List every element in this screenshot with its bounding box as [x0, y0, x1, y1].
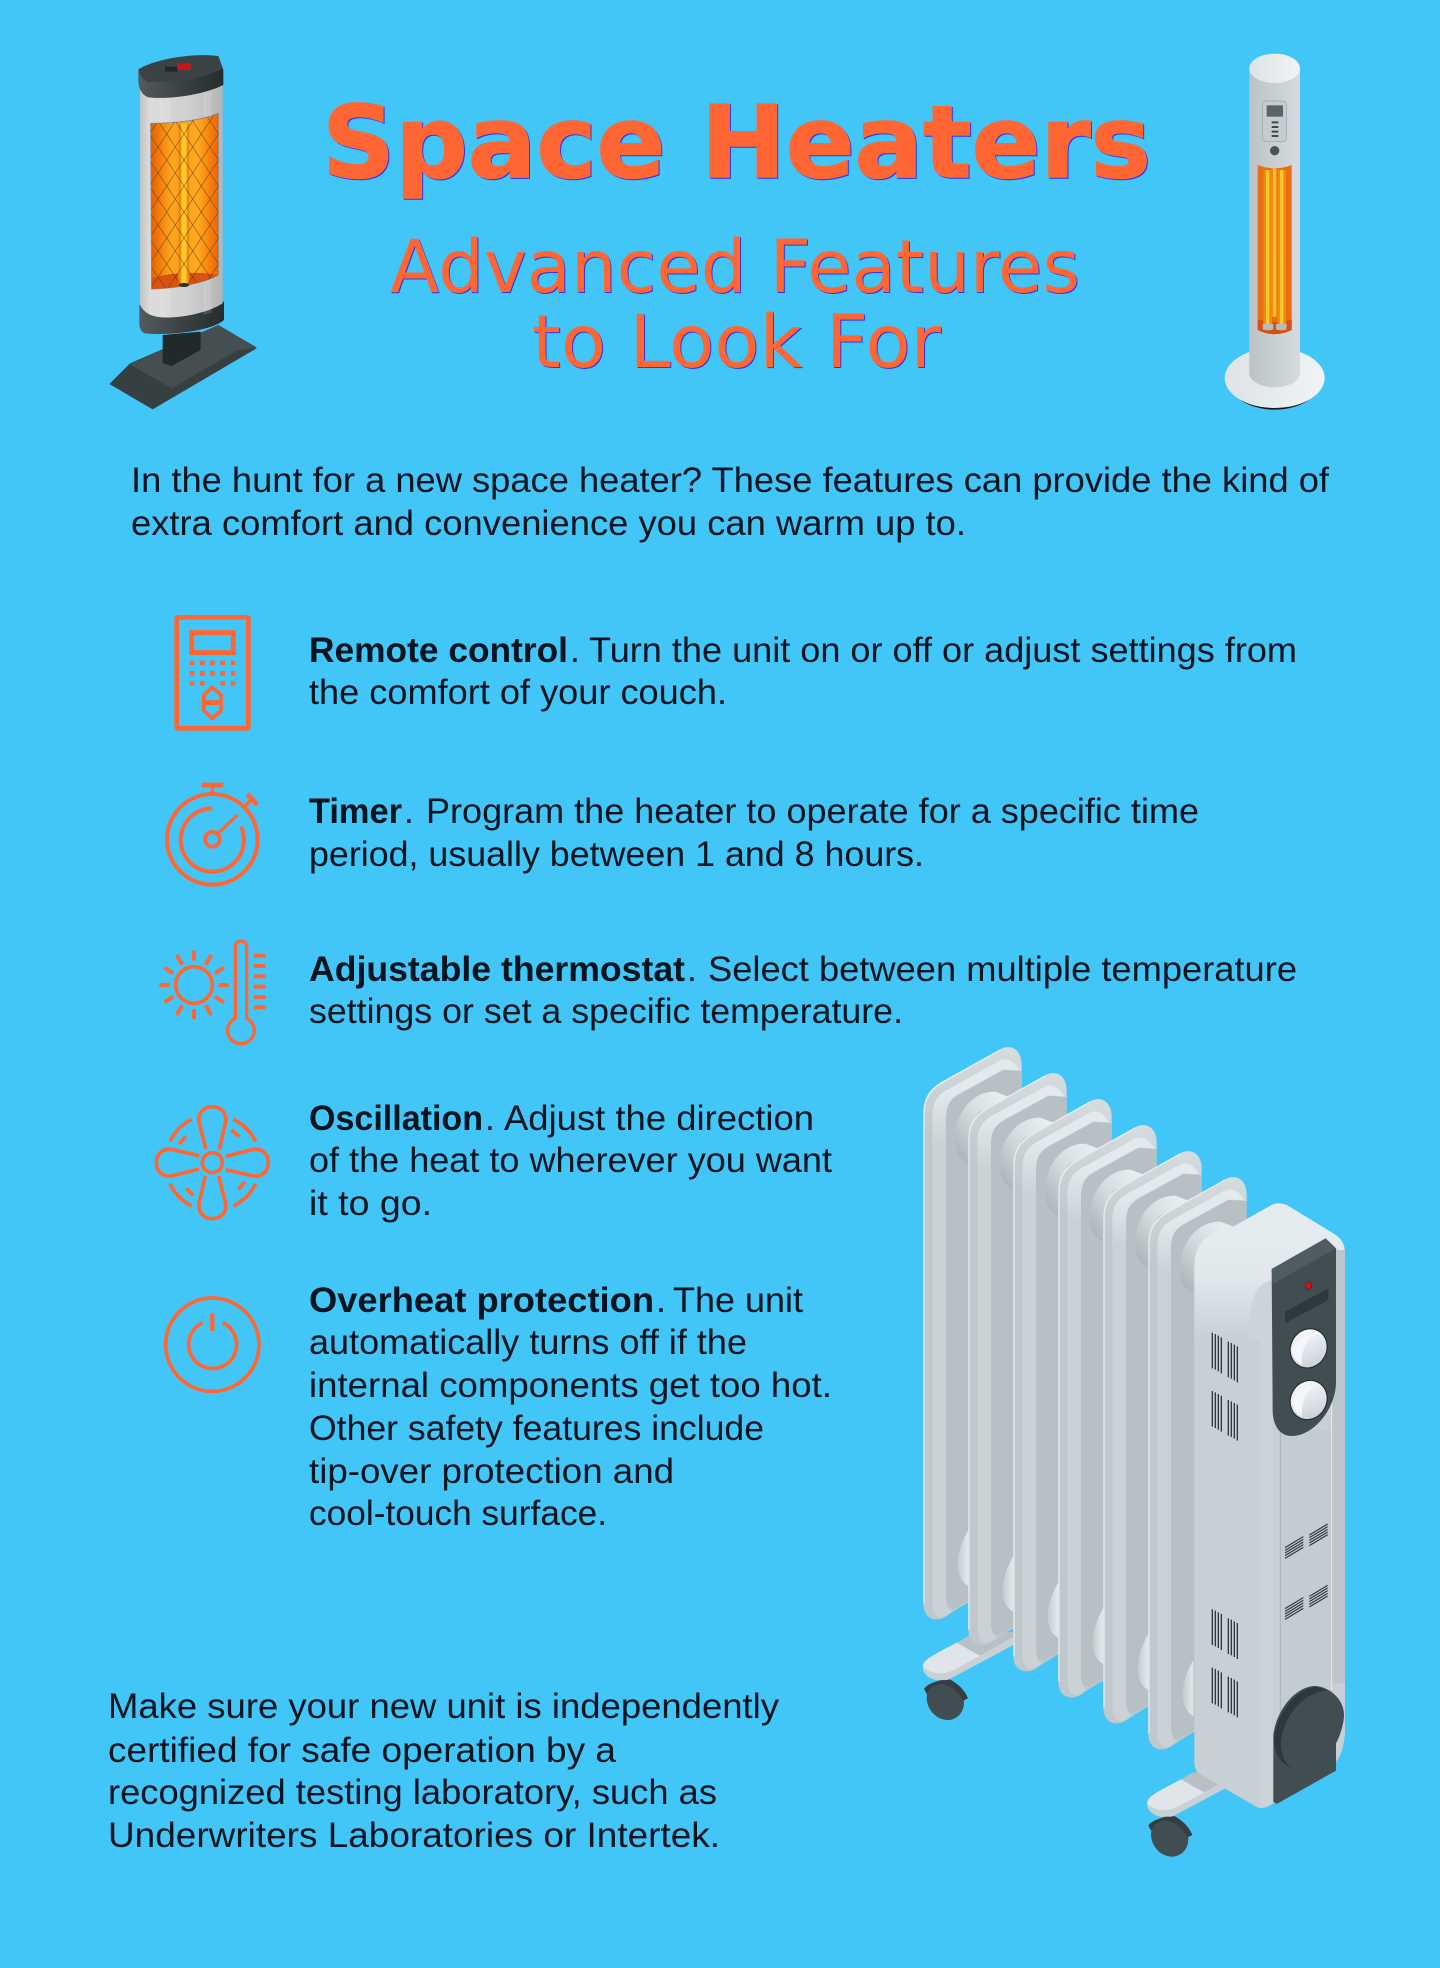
feature: timer: period, usually between 1 and 8 hours. [309, 834, 924, 874]
feature: adjustable thermostat: Select between multiple temperature [708, 949, 1297, 989]
feature: overheat protection [309, 1280, 832, 1533]
footer note [108, 1686, 779, 1855]
feature: overheat protection: Other safety features include [309, 1408, 764, 1448]
subtitle: to Look For [532, 300, 942, 385]
icon: black quartz heater [109, 55, 257, 409]
feature: adjustable thermostat: Adjustable thermostat [309, 949, 685, 989]
feature: remote control: the comfort of your couch. [309, 672, 727, 712]
title: Space Heaters [322, 84, 1151, 201]
feature: timer: . [404, 791, 414, 831]
feature: timer: Program the heater to operate for a specific time [426, 791, 1199, 831]
footer note: recognized testing laboratory, such as [108, 1772, 717, 1812]
feature: remote control: Remote control [309, 630, 568, 670]
feature: adjustable thermostat: . [687, 949, 697, 989]
feature: oscillation [309, 1098, 832, 1223]
feature: remote control: . [570, 630, 580, 670]
icon: fan [156, 1107, 268, 1219]
intro text [131, 460, 1329, 543]
feature: timer: Timer [309, 791, 402, 831]
feature: adjustable thermostat: settings or set a specific temperature. [309, 991, 903, 1031]
icon: power [166, 1298, 259, 1391]
icon: stopwatch [167, 785, 258, 885]
feature: overheat protection: internal components get too hot. [309, 1365, 832, 1405]
subtitle [390, 225, 1080, 385]
icon: oil-filled radiator [919, 1047, 1345, 1864]
icon: sun and thermometer [159, 941, 266, 1044]
subtitle: Advanced Features [390, 225, 1080, 310]
feature: adjustable thermostat [309, 949, 1297, 1031]
intro text: extra comfort and convenience you can warm up to. [131, 503, 966, 543]
footer note: certified for safe operation by a [108, 1730, 616, 1770]
icon: remote control [177, 617, 248, 728]
feature: overheat protection: Overheat protection [309, 1280, 654, 1320]
feature: overheat protection: tip-over protection and [309, 1451, 674, 1491]
feature: oscillation: Adjust the direction [504, 1098, 814, 1138]
footer note: Underwriters Laboratories or Intertek. [108, 1815, 720, 1855]
feature: oscillation: Oscillation [309, 1098, 483, 1138]
feature: remote control [309, 630, 1297, 712]
icon: white tower heater [1225, 54, 1325, 410]
feature: overheat protection: The unit [673, 1280, 803, 1320]
feature: timer [309, 791, 1199, 874]
feature: oscillation: it to go. [309, 1183, 432, 1223]
feature: overheat protection: cool-touch surface. [309, 1493, 607, 1533]
feature: oscillation: . [485, 1098, 495, 1138]
feature: overheat protection: . [656, 1280, 666, 1320]
feature: remote control: Turn the unit on or off or adjust settings from [589, 630, 1297, 670]
intro text: In the hunt for a new space heater? These features can provide the kind of [131, 460, 1329, 500]
feature: overheat protection: automatically turns off if the [309, 1322, 747, 1362]
footer note: Make sure your new unit is independently [108, 1686, 779, 1726]
feature: oscillation: of the heat to wherever you want [309, 1140, 832, 1180]
